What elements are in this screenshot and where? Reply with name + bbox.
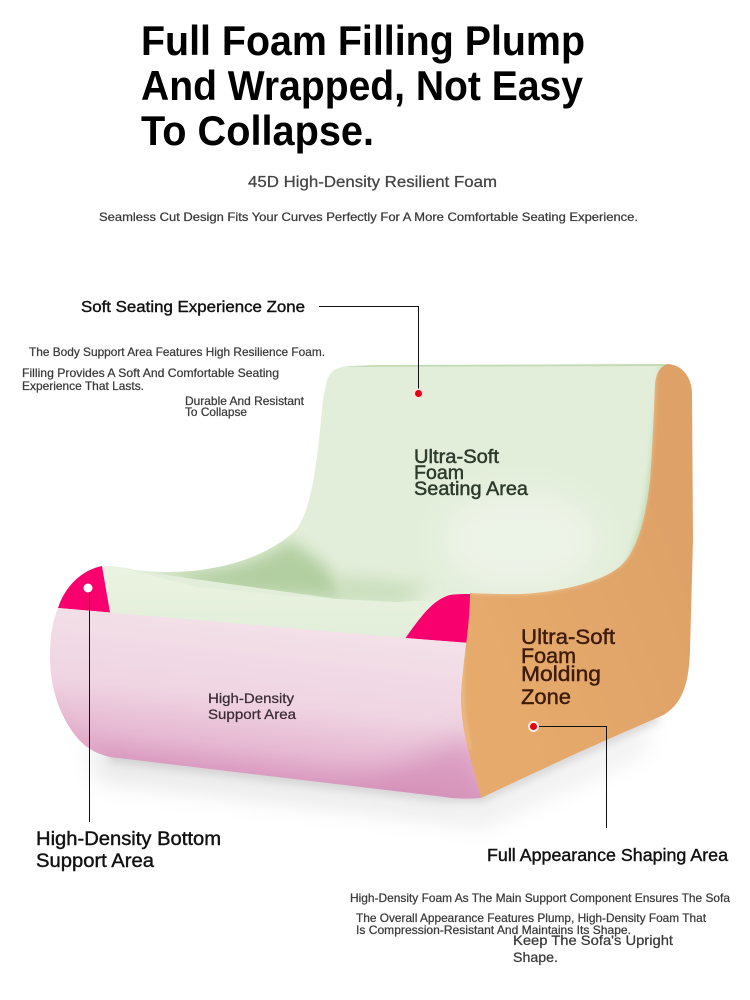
label: ultra-soft foam molding zone: Molding: [521, 663, 601, 686]
text: body support: Experience That Lasts.: [22, 379, 144, 393]
callout: full appearance shaping area: Full Appearance Shaping Area: [487, 845, 728, 865]
backrest and seat: green foam: [103, 363, 668, 640]
text: shaping description: Keep The Sofa's Upright: [513, 932, 673, 948]
seat front band: [103, 566, 440, 640]
sofa illustration: [40, 363, 693, 800]
label: ultra-soft foam molding zone: Zone: [521, 686, 571, 709]
title: And Wrapped, Not Easy: [141, 62, 584, 109]
ground shadow: [85, 710, 660, 825]
title: To Collapse.: [141, 107, 374, 154]
text: shaping description: The Overall Appearance Features Plump, High-Density Foam That: [356, 911, 707, 925]
label: ultra-soft foam seating area: Foam: [414, 463, 464, 484]
magenta cut: right: [406, 594, 471, 643]
label: high-density support area: Support Area: [208, 706, 296, 722]
text: shaping description: Is Compression-Resistant And Maintains Its Shape.: [356, 923, 631, 937]
subtitle: 45D High-Density Resilient Foam: [248, 174, 497, 191]
text: shaping description: Shape.: [513, 949, 558, 965]
callout: soft seating experience zone: [81, 299, 424, 398]
label: ultra-soft foam seating area: [414, 447, 528, 500]
high-density pink foam: [40, 608, 490, 800]
description: Seamless Cut Design Fits Your Curves Perfectly For A More Comfortable Seating Experience.: [99, 210, 638, 224]
orange foam side panel: [461, 364, 693, 798]
text: body support: The Body Support Area Features High Resilience Foam.: [29, 345, 325, 359]
magenta cut: left: [58, 566, 110, 612]
title: [141, 17, 585, 154]
callout: full appearance shaping area: [487, 721, 728, 865]
text: body support: Filling Provides A Soft And Comfortable Seating: [22, 366, 279, 380]
callout: high-density bottom support area: [36, 584, 221, 872]
label: ultra-soft foam seating area: Seating Area: [414, 479, 528, 500]
text: shaping description: High-Density Foam As The Main Support Component Ensures The Sofa: [350, 891, 730, 905]
callout: soft seating experience zone: Soft Seating Experience Zone: [81, 299, 305, 316]
callout: high-density bottom support area: Support Area: [36, 851, 154, 872]
text: body support: Durable And Resistant: [185, 394, 305, 408]
callout: high-density bottom support area: High-Density Bottom: [36, 829, 221, 850]
label: ultra-soft foam molding zone: Ultra-Soft: [521, 626, 615, 649]
label: ultra-soft foam molding zone: Foam: [521, 645, 576, 668]
title: Full Foam Filling Plump: [141, 17, 585, 64]
label: ultra-soft foam seating area: Ultra-Soft: [414, 447, 500, 468]
text: shaping description: [350, 891, 730, 965]
label: ultra-soft foam molding zone: [521, 626, 615, 709]
label: high-density support area: High-Density: [208, 690, 294, 706]
label: high-density support area: [208, 690, 296, 722]
text: body support: To Collapse: [185, 405, 247, 419]
text: body support: [22, 345, 325, 419]
